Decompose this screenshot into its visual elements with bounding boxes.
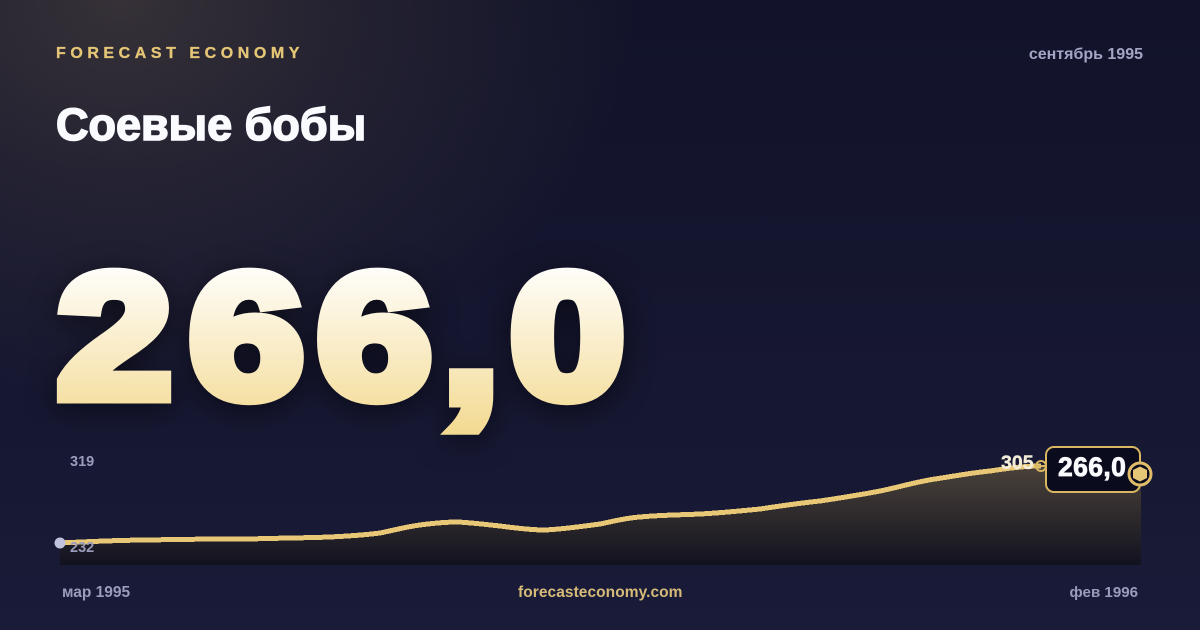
axis minimum label: 232 — [70, 540, 94, 556]
end date label: фев 1996 — [1070, 584, 1138, 601]
current value badge — [1046, 447, 1140, 492]
title: Соевые бобы — [56, 99, 366, 150]
start date label: мар 1995 — [62, 584, 130, 601]
brand label: FORECAST ECONOMY — [56, 45, 304, 62]
website label: forecasteconomy.com — [518, 584, 683, 601]
peak value label: 305 — [1001, 452, 1034, 474]
price line — [60, 466, 1041, 543]
big value: 266,0 — [57, 238, 625, 439]
axis maximum label: 319 — [70, 454, 94, 470]
current point marker — [1129, 463, 1151, 485]
start point marker — [54, 538, 66, 548]
date label: сентябрь 1995 — [1029, 46, 1143, 63]
area fill — [60, 466, 1141, 565]
peak point marker — [1035, 461, 1047, 471]
current value text: 266,0 — [1058, 452, 1126, 482]
